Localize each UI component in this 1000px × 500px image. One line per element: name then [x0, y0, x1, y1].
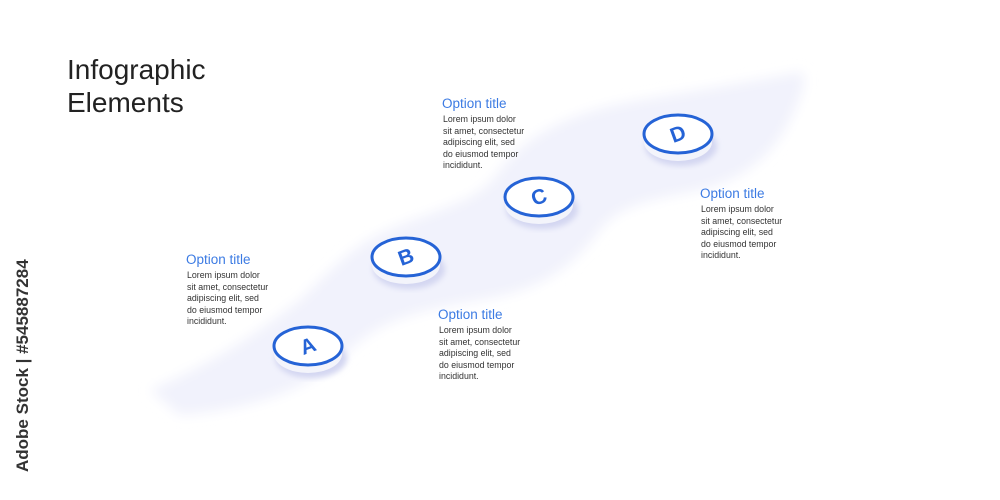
option B [438, 307, 520, 381]
option C: Lorem ipsum dolor [443, 114, 516, 124]
disc B: B [395, 244, 417, 271]
disc C: C [528, 184, 550, 211]
watermark side text: Adobe Stock | #545887284 [13, 259, 32, 472]
disc D [644, 115, 717, 166]
option B: adipiscing elit, sed [439, 348, 511, 358]
option C: do eiusmod tempor [443, 148, 518, 158]
option D: adipiscing elit, sed [701, 227, 773, 237]
disc D: D [667, 121, 689, 148]
option A: sit amet, consectetur [187, 282, 268, 292]
option C: adipiscing elit, sed [443, 137, 515, 147]
option A: adipiscing elit, sed [187, 293, 259, 303]
option D [700, 186, 782, 260]
option D: sit amet, consectetur [701, 216, 782, 226]
option C [442, 96, 524, 170]
option C: incididunt. [443, 160, 483, 170]
option C: Option title [442, 96, 507, 111]
option D: do eiusmod tempor [701, 238, 776, 248]
disc A: A [297, 333, 319, 360]
option D: Lorem ipsum dolor [701, 204, 774, 214]
option B: Option title [438, 307, 503, 322]
disc A [274, 327, 347, 378]
option D: incididunt. [701, 250, 741, 260]
option A: Lorem ipsum dolor [187, 270, 260, 280]
title: Infographic [67, 54, 206, 85]
option B: sit amet, consectetur [439, 336, 520, 346]
option A: do eiusmod tempor [187, 304, 262, 314]
option B: do eiusmod tempor [439, 360, 514, 370]
title: Elements [67, 87, 184, 118]
option B: Lorem ipsum dolor [439, 325, 512, 335]
title [67, 54, 206, 118]
option C: sit amet, consectetur [443, 126, 524, 136]
option B: incididunt. [439, 371, 479, 381]
disc B [372, 238, 445, 289]
option A [186, 252, 268, 326]
option D: Option title [700, 186, 765, 201]
option A: Option title [186, 252, 251, 267]
option A: incididunt. [187, 316, 227, 326]
disc C [505, 178, 578, 229]
